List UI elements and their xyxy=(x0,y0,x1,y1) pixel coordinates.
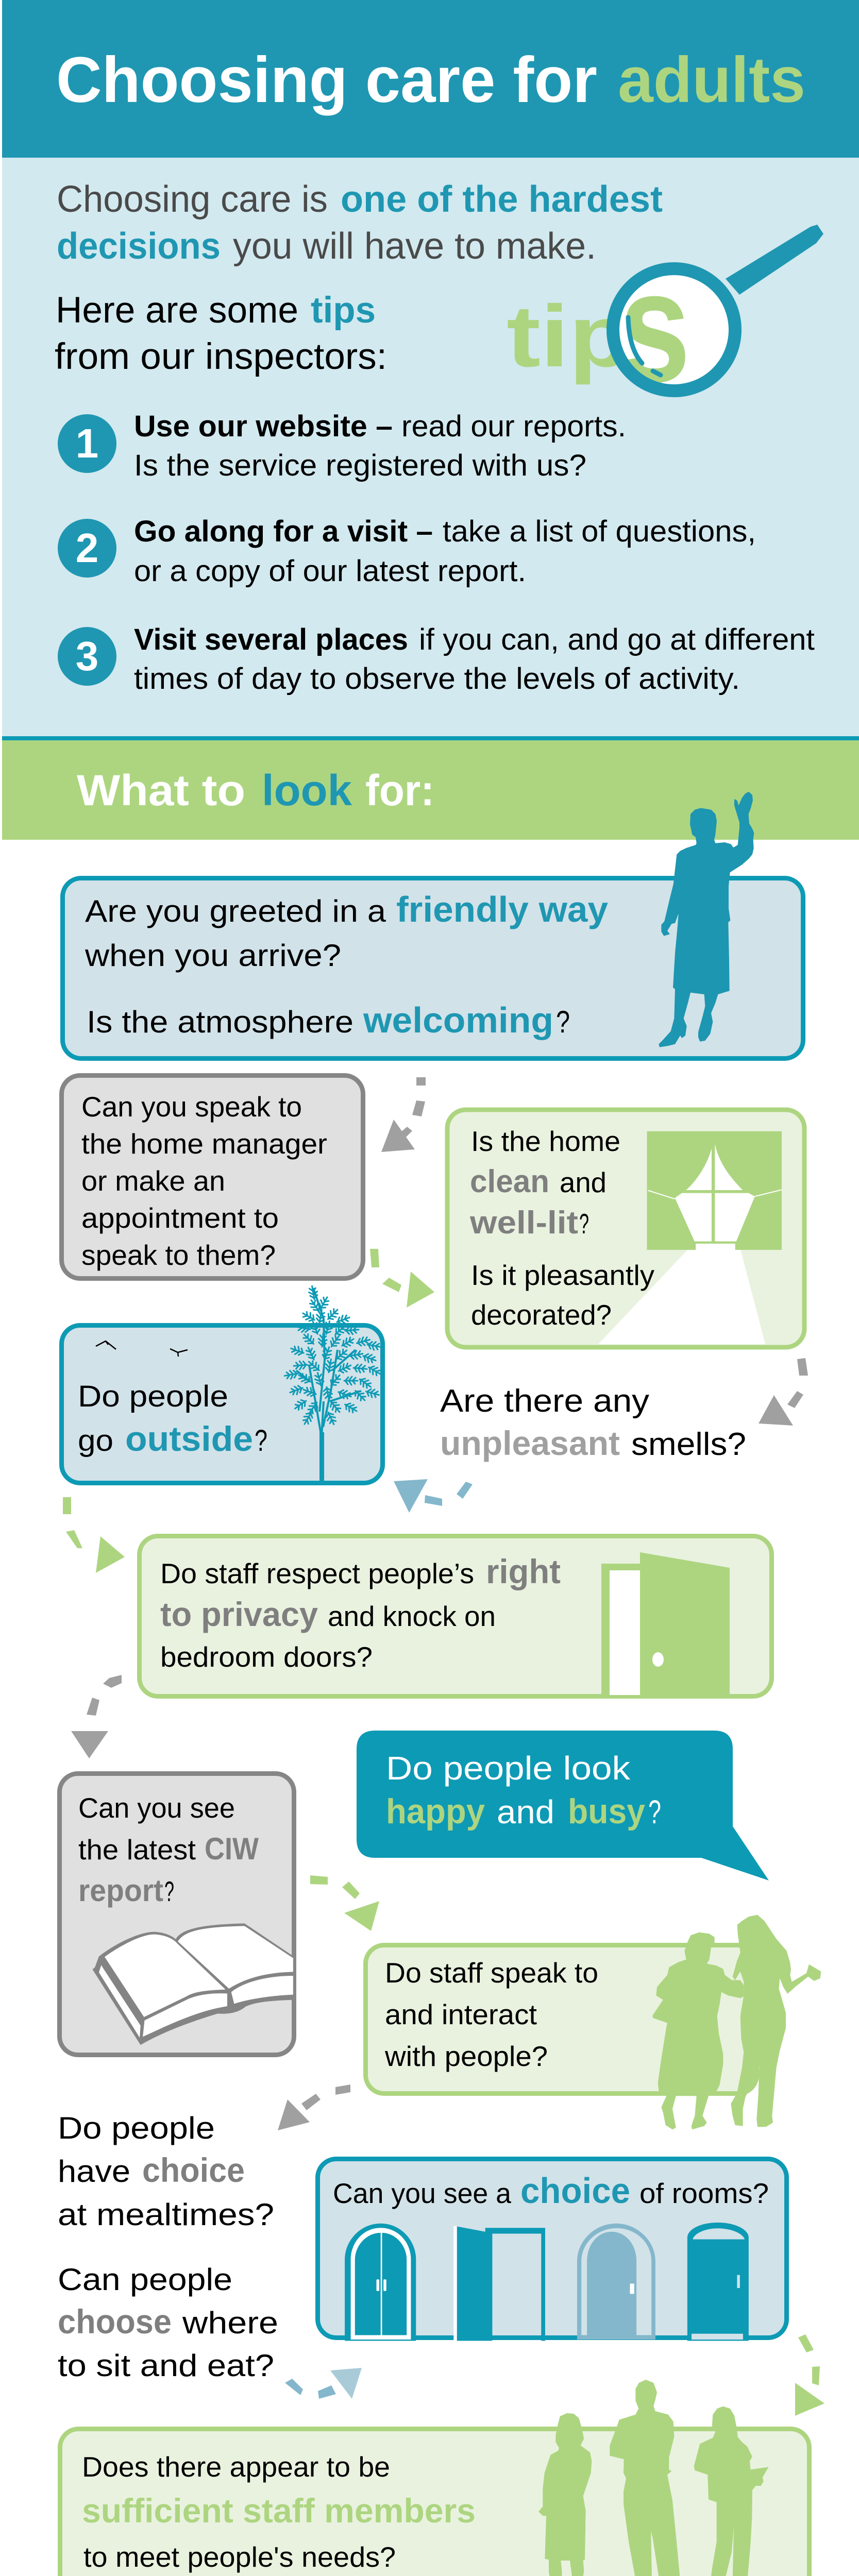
panel: intro background xyxy=(2,158,859,736)
panel: outside box: Do people xyxy=(78,1380,228,1413)
text: unpleasant smells: smells? xyxy=(631,1427,746,1462)
callout: happy and busy speech bubble: happy xyxy=(386,1792,485,1831)
text: mealtimes questions: where xyxy=(182,2306,278,2340)
arrow: outside to privacy xyxy=(63,1497,125,1573)
privacy text: Do staff respect people’s xyxy=(160,1557,474,1589)
staff interaction text: and interact xyxy=(385,1998,537,2030)
arrow: mealtimes to rooms xyxy=(285,2368,362,2399)
panel: manager box: the home manager xyxy=(81,1128,327,1160)
arrow: staff box to mealtimes xyxy=(278,2084,350,2130)
arrow: smells to outside xyxy=(394,1479,473,1513)
greeting text xyxy=(85,889,608,1040)
panel: CIW report box: the latest xyxy=(78,1834,196,1866)
sufficient staff text: sufficient staff members xyxy=(82,2492,476,2530)
title: adults xyxy=(618,44,805,116)
staff interaction text: Do staff speak to xyxy=(385,1957,598,1989)
greeting text: welcoming xyxy=(363,1000,553,1040)
section heading xyxy=(77,766,434,815)
panel: outside box: ? xyxy=(255,1424,267,1458)
arrow: report to staff box xyxy=(310,1875,379,1931)
greeting text: when you arrive? xyxy=(85,938,341,973)
privacy text: to privacy xyxy=(160,1595,318,1633)
privacy text xyxy=(160,1552,561,1673)
clean text: well-lit xyxy=(469,1205,578,1241)
callout: happy and busy speech bubble xyxy=(357,1731,769,1880)
icon: three staff silhouettes xyxy=(538,2380,769,2576)
section heading: for: xyxy=(365,766,434,815)
tip 1: 1 xyxy=(76,420,98,466)
tip 1: Use our website – xyxy=(134,410,393,443)
section heading: What to xyxy=(77,766,245,815)
clean text: Is the home xyxy=(471,1125,620,1157)
panel: privacy box xyxy=(139,1536,772,1696)
callout: happy and busy speech bubble: and xyxy=(497,1793,554,1831)
callout: happy and busy speech bubble: ? xyxy=(648,1793,661,1831)
greeting text: Are you greeted in a xyxy=(85,894,386,928)
tip 2: Go along for a visit – xyxy=(134,515,433,548)
intro text: decisions xyxy=(57,226,221,267)
arrow: rooms to staff box xyxy=(795,2334,824,2416)
text: mealtimes questions: choice xyxy=(142,2151,245,2189)
sufficient staff text: Does there appear to be xyxy=(82,2451,390,2483)
tip 2: or a copy of our latest report. xyxy=(134,554,526,588)
panel: CIW report box xyxy=(60,1773,294,2055)
clean text: Is it pleasantly xyxy=(471,1259,654,1291)
tip 2 xyxy=(58,515,756,588)
arrow: clean box to smells xyxy=(759,1358,808,1426)
icon: waving woman silhouette xyxy=(659,792,754,1047)
clean text: decorated? xyxy=(471,1299,612,1331)
panel: greeting box xyxy=(63,878,803,1058)
tip 1 xyxy=(58,410,626,482)
panel: manager box: speak to them? xyxy=(81,1239,276,1271)
panel: CIW report box: Can you see xyxy=(78,1792,235,1824)
text: unpleasant smells: unpleasant xyxy=(440,1424,620,1462)
icon: birds xyxy=(96,1341,188,1357)
icon: magnifying glass over tips: tip xyxy=(507,287,631,385)
greeting text: Is the atmosphere xyxy=(87,1005,353,1039)
divider strip xyxy=(2,736,859,741)
intro text xyxy=(57,179,663,267)
tips intro text: from our inspectors: xyxy=(55,336,387,377)
text: unpleasant smells: Are there any xyxy=(440,1383,649,1419)
panel: CIW report box: ? xyxy=(164,1875,174,1907)
tip 2: 2 xyxy=(76,525,98,571)
callout: happy and busy speech bubble: Do people look xyxy=(386,1750,631,1787)
tip 3: times of day to observe the levels of activity. xyxy=(134,662,740,696)
sufficient staff text xyxy=(82,2451,476,2576)
text: mealtimes questions: at mealtimes? xyxy=(58,2197,274,2232)
callout: happy and busy speech bubble: busy xyxy=(568,1792,645,1831)
staff interaction text: with people? xyxy=(384,2040,548,2072)
arrow: box 1 to manager xyxy=(381,1077,426,1152)
clean text: ? xyxy=(579,1208,589,1240)
panel: manager box xyxy=(62,1076,363,1279)
panel: CIW report box: report xyxy=(78,1873,163,1908)
privacy text: bedroom doors? xyxy=(160,1641,373,1673)
tips intro text: Here are some xyxy=(56,290,298,331)
panel: clean and well-lit box xyxy=(447,1110,804,1347)
panel: outside box xyxy=(62,1325,382,1483)
icon: four doors xyxy=(345,2223,749,2341)
text: mealtimes questions: have xyxy=(58,2154,130,2189)
intro text: one of the hardest xyxy=(341,179,663,220)
panel: staff interaction box xyxy=(366,1945,756,2094)
icon: two people silhouette xyxy=(653,1915,821,2129)
intro text: Choosing care is xyxy=(57,179,328,220)
privacy text: and knock on xyxy=(328,1600,496,1632)
section band: what to look for xyxy=(2,740,859,840)
tips intro text: tips xyxy=(311,290,376,331)
choice of rooms text: of rooms? xyxy=(639,2177,769,2209)
choice of rooms text: choice xyxy=(520,2171,630,2211)
title: Choosing care for xyxy=(56,44,597,116)
icon: curtained window xyxy=(598,1131,782,1344)
text: mealtimes questions xyxy=(58,2111,278,2383)
panel: manager box: appointment to xyxy=(81,1202,279,1234)
sufficient staff text: to meet people's needs? xyxy=(83,2541,396,2573)
tip 2: take a list of questions, xyxy=(443,515,756,548)
icon: open book xyxy=(93,1923,294,2045)
panel: choice of rooms box xyxy=(317,2159,786,2338)
text: mealtimes questions: choose xyxy=(58,2302,172,2341)
text: mealtimes questions: Do people xyxy=(58,2111,215,2145)
panel: outside box: outside xyxy=(125,1419,253,1459)
choice of rooms text xyxy=(333,2171,769,2211)
icon: magnifying glass over tips xyxy=(507,225,823,415)
icon: tree xyxy=(284,1285,382,1482)
greeting text: ? xyxy=(556,1005,570,1039)
privacy text: right xyxy=(486,1552,561,1590)
text: mealtimes questions: to sit and eat? xyxy=(58,2348,274,2383)
panel: manager box: or make an xyxy=(81,1165,225,1197)
header band xyxy=(2,0,859,158)
section heading: look xyxy=(262,766,352,815)
icon: magnifying glass over tips: s xyxy=(619,239,690,415)
arrow: privacy to report xyxy=(71,1675,122,1758)
tip 3: 3 xyxy=(76,633,98,679)
panel: manager box: Can you speak to xyxy=(81,1091,302,1123)
panel: CIW report box: CIW xyxy=(205,1832,259,1866)
tip 3: Visit several places xyxy=(134,623,408,656)
intro text: you will have to make. xyxy=(233,226,596,267)
clean text: and xyxy=(560,1166,607,1198)
tip 1: read our reports. xyxy=(401,410,626,443)
clean text xyxy=(469,1125,654,1331)
panel: outside box: go xyxy=(78,1424,113,1458)
tips intro text xyxy=(55,290,387,377)
icon: open door xyxy=(601,1552,730,1697)
arrow: manager to clean box xyxy=(370,1249,434,1308)
choice of rooms text: Can you see a xyxy=(333,2177,511,2209)
text: mealtimes questions: Can people xyxy=(58,2262,232,2297)
staff interaction text xyxy=(384,1957,598,2072)
tip 3 xyxy=(58,623,815,696)
tip 3: if you can, and go at different xyxy=(419,623,815,656)
tip 1: Is the service registered with us? xyxy=(134,449,586,482)
panel: sufficient staff box xyxy=(60,2429,809,2576)
clean text: clean xyxy=(470,1164,549,1199)
text: unpleasant smells xyxy=(440,1383,746,1462)
greeting text: friendly way xyxy=(396,889,608,929)
